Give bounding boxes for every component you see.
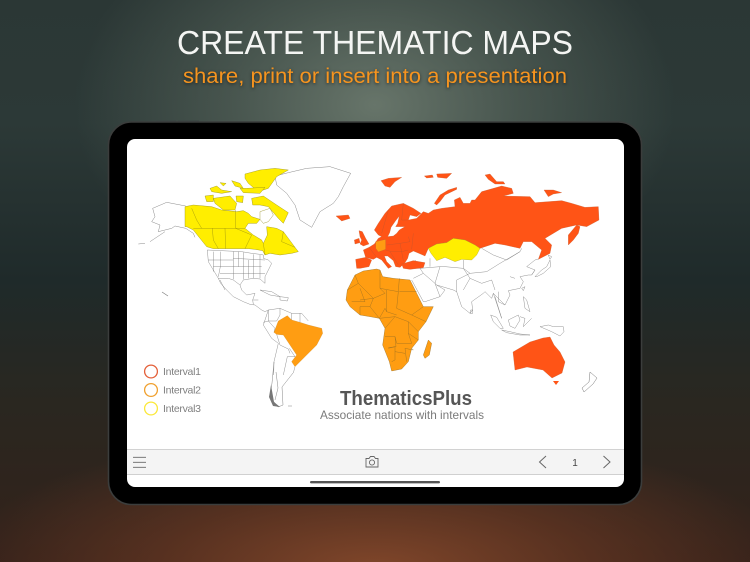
patagonia tip [269,385,280,407]
iceland [336,215,350,221]
united states [207,250,272,285]
kamchatka [568,225,580,245]
eurasia red group [336,173,599,269]
icon: previous [540,456,546,468]
southern cone [270,362,293,407]
ireland [354,238,360,244]
icon: menu [133,457,146,467]
asia outlines [412,248,564,336]
tasmania [553,381,559,385]
greenland and alaska [138,167,351,244]
caribbean [260,290,288,301]
madagascar [423,340,432,358]
svalbard [381,177,402,187]
world map [138,167,599,407]
alaska [138,202,195,244]
european borders [369,203,413,265]
united states and latin america [207,250,308,375]
iberia [356,257,372,268]
russia and europe [363,186,599,268]
new siberian islands [485,174,505,184]
map subtitle: Associate nations with intervals [320,408,484,422]
subtitle: share, print or insert into a presentation [183,65,567,88]
greenland [275,167,351,227]
turkey [402,261,425,269]
australia [513,337,565,378]
home indicator [310,481,440,483]
novaya zemlya [434,187,457,205]
baltic sea [388,216,405,237]
germany [376,239,386,252]
franz josef land [424,173,452,178]
south america outline [263,308,308,375]
legend item: interval 1: Interval1 [163,366,201,378]
toolbar [127,449,624,475]
canada [185,168,298,255]
icon: camera [366,456,378,467]
legend item: interval 2: Interval2 [163,384,201,396]
foxe basin [260,208,273,223]
wrangel [544,190,562,197]
uk [359,231,369,246]
page number: 1 [572,458,578,469]
africa [346,269,433,371]
new zealand [582,372,597,392]
african borders [347,270,426,362]
legend item: interval 3: Interval3 [163,403,201,415]
kazakhstan [428,238,480,262]
screen [127,139,624,487]
mexico and central america [218,278,268,312]
legend [145,365,201,415]
icon: next [604,456,610,468]
map title: ThematicsPlus [340,388,472,410]
brazil [274,316,323,367]
title: CREATE THEMATIC MAPS [177,24,573,61]
tablet frame [108,120,642,504]
hawaii [162,292,168,296]
